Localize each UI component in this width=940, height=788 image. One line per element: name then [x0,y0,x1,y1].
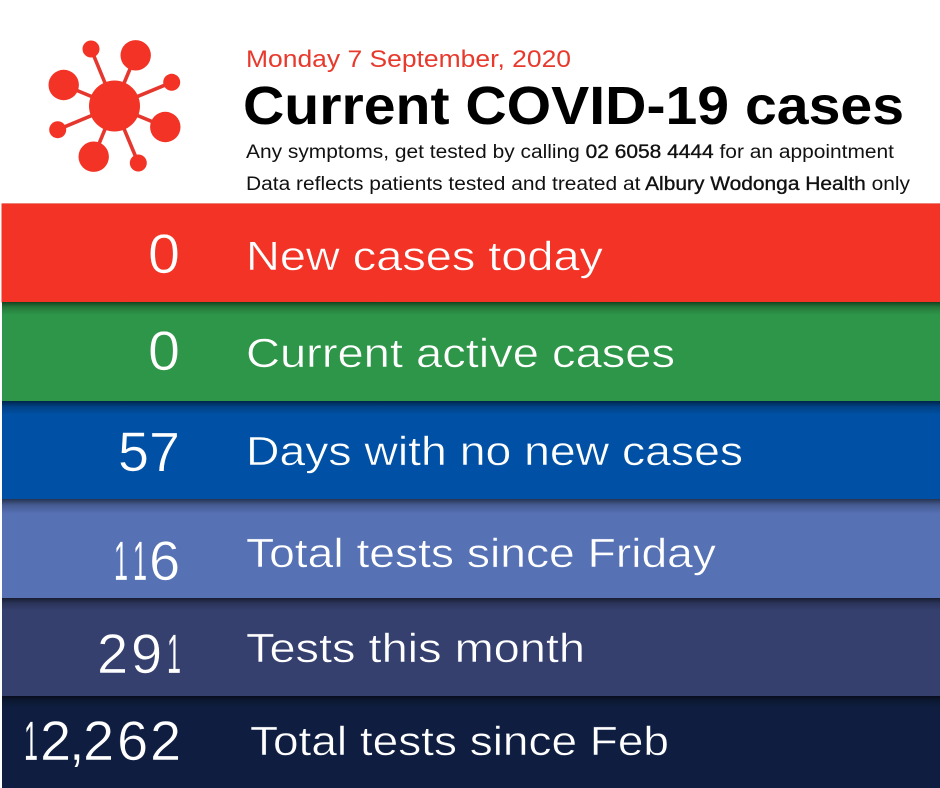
panel: total tests since Feb: Total tests since Feb [250,718,669,764]
panel: days with no new cases: Days with no new cases [246,428,743,474]
text: testing instructions: Any symptoms, get tested by calling 02 6058 4444 for an appointment [246,142,895,163]
panel: total tests since Friday: 6 [149,529,180,592]
panel: total tests since Feb [2,696,940,788]
panel: tests this month: Tests this month [246,625,585,671]
date: Monday 7 September, 2020 [246,46,571,73]
panel: total tests since Friday: 1 [114,529,128,592]
panel: new cases today [2,204,940,302]
panel: days with no new cases: 57 [118,420,180,483]
panel: new cases today: New cases today [246,233,604,279]
panel: tests this month: 1 [167,622,181,685]
panel: total tests since Friday: 1 [133,529,147,592]
panel: total tests since Friday: Total tests since Friday [246,530,717,576]
panel: total tests since Feb: 1 [24,709,38,772]
panel: current active cases [2,302,940,401]
panel: total tests since Friday [2,499,940,598]
panel: current active cases: Current active cases [246,330,675,376]
panel: tests this month: 29 [97,622,162,685]
title: Current COVID-19 cases [243,76,904,136]
panel: current active cases: 0 [148,319,180,382]
panel: tests this month [2,598,940,696]
panel: new cases today: 0 [148,222,180,285]
icon: virus [48,40,180,172]
panel: total tests since Feb: 2,262 [40,709,181,772]
panel: days with no new cases [2,401,940,499]
text: data note: Data reflects patients tested and treated at Albury Wodonga Health only [246,174,911,195]
